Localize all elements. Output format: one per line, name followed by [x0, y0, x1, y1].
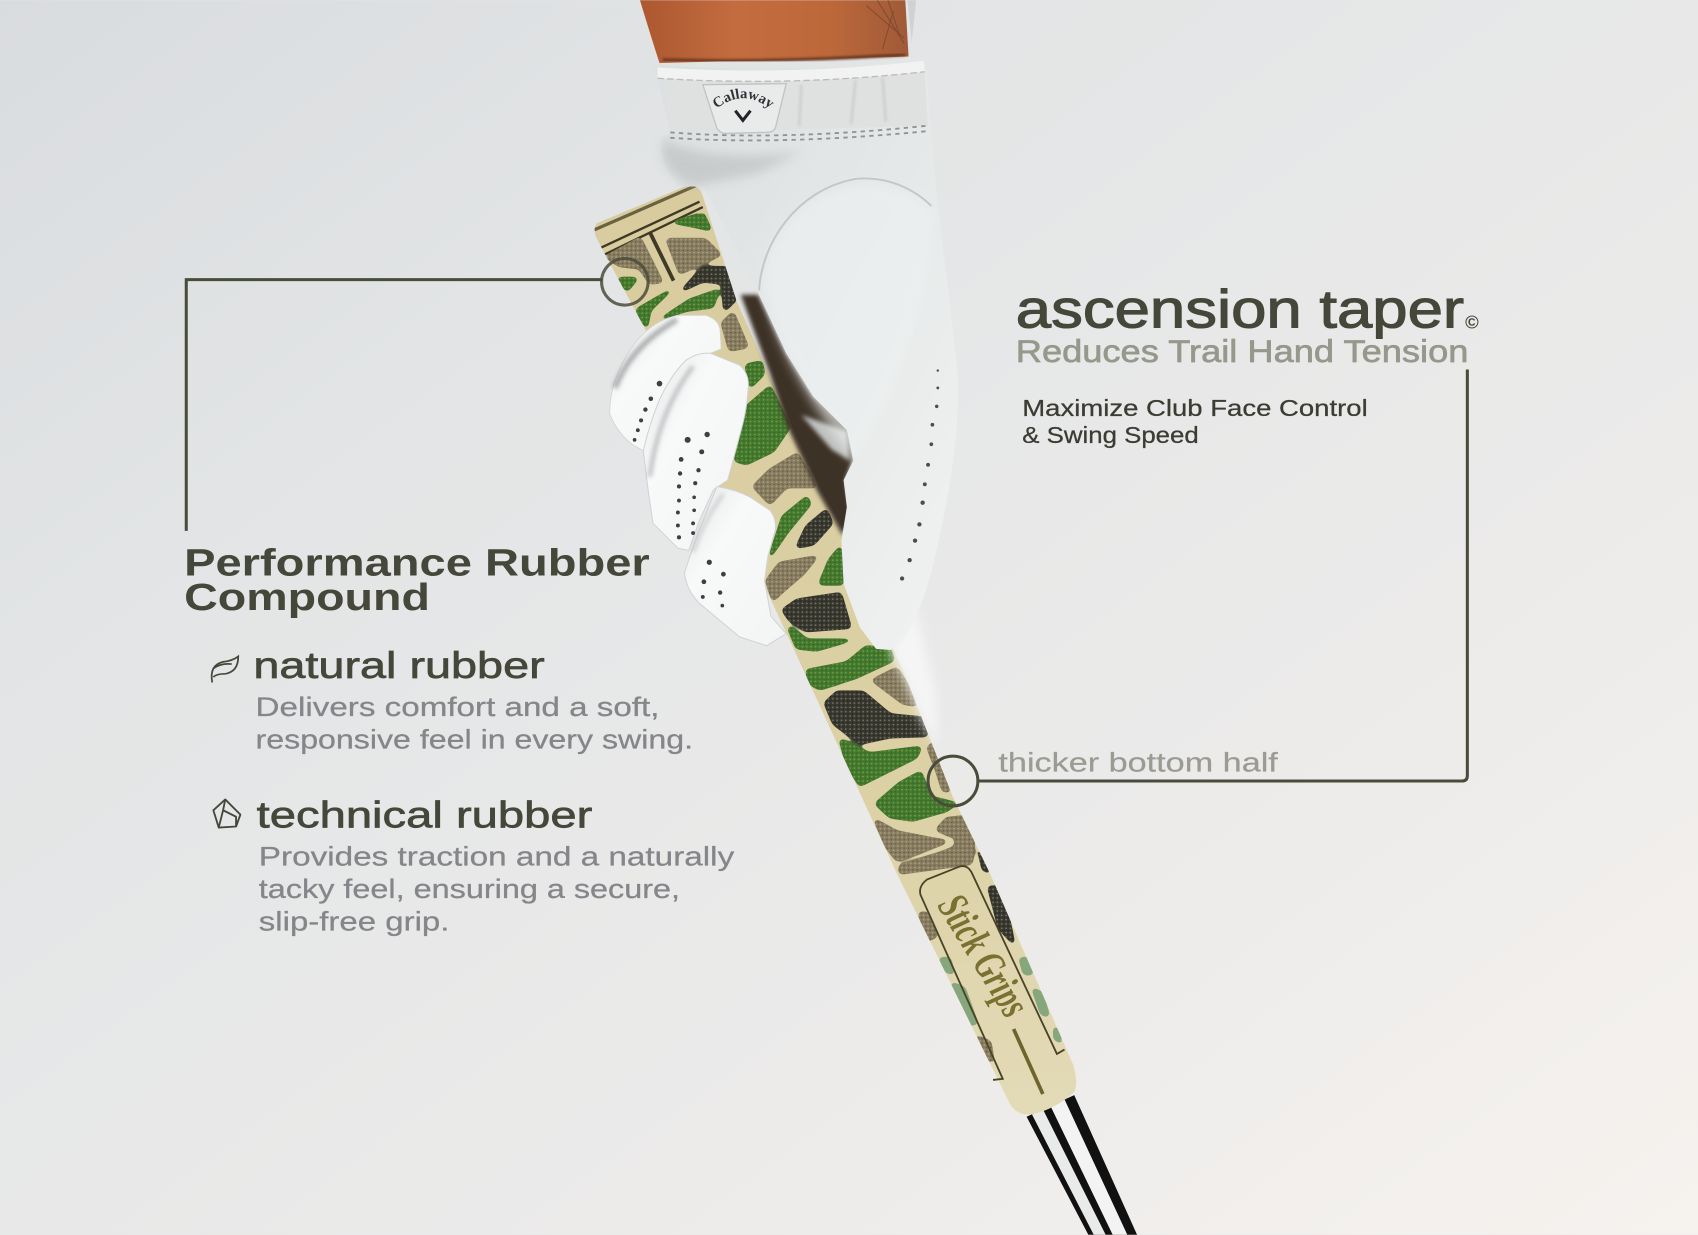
- callout line: thicker bottom half to ascension taper: [928, 370, 1467, 806]
- heading: performance rubber compound: Compound: [184, 577, 430, 619]
- brand tag: Callaway: [713, 88, 774, 108]
- white blur behind thumb: [890, 607, 938, 747]
- grip: [595, 185, 1076, 1115]
- glove: cuff, palm and thumb: [657, 61, 942, 650]
- technical rubber description: tacky feel, ensuring a secure,: [259, 873, 680, 904]
- natural rubber description: [256, 691, 693, 755]
- photo: gloved hand holding golf grip: [594, 0, 1137, 1235]
- golf club shaft: [1027, 1095, 1137, 1235]
- text block: maximize club face control: Maximize Club Face Control: [1022, 395, 1368, 421]
- natural rubber description: responsive feel in every swing.: [256, 724, 693, 755]
- palm patch seam: [763, 185, 933, 460]
- forearm: [640, 0, 916, 63]
- icon: rubber block: [213, 799, 240, 828]
- technical rubber description: [259, 840, 735, 936]
- callout line: top of grip to rubber compound: [186, 259, 648, 531]
- text block: maximize club face control: & Swing Speed: [1022, 422, 1199, 448]
- technical rubber heading: technical rubber: [257, 795, 592, 836]
- icon: leaf: [212, 656, 238, 682]
- natural rubber heading: natural rubber: [253, 645, 545, 686]
- text block: maximize club face control: [1022, 395, 1368, 448]
- brand tag: [702, 83, 787, 134]
- technical rubber description: slip-free grip.: [259, 905, 449, 936]
- light fold under palm: [801, 415, 850, 460]
- index finger: [610, 315, 721, 451]
- subheading: reduces trail hand tension: Reduces Trail Hand Tension: [1016, 334, 1468, 369]
- ring finger: [643, 353, 748, 550]
- thumb perforations: [900, 369, 939, 581]
- heading: performance rubber compound: Performance Rubber: [184, 542, 650, 584]
- middle finger: [684, 486, 786, 646]
- camouflage patches: [606, 214, 1061, 1061]
- logo text: Stick Grips: [928, 886, 1039, 1025]
- shadow between grip and palm: [741, 295, 852, 535]
- copyright mark: ©: [1465, 311, 1479, 332]
- technical rubber description: Provides traction and a naturally: [259, 840, 735, 871]
- heading: performance rubber compound: [184, 542, 650, 619]
- natural rubber description: Delivers comfort and a soft,: [256, 691, 659, 722]
- label: thicker bottom half: thicker bottom half: [998, 746, 1278, 777]
- heading: ascension taper: ascension taper: [1016, 279, 1464, 339]
- grip logo plaque: [920, 866, 1064, 1094]
